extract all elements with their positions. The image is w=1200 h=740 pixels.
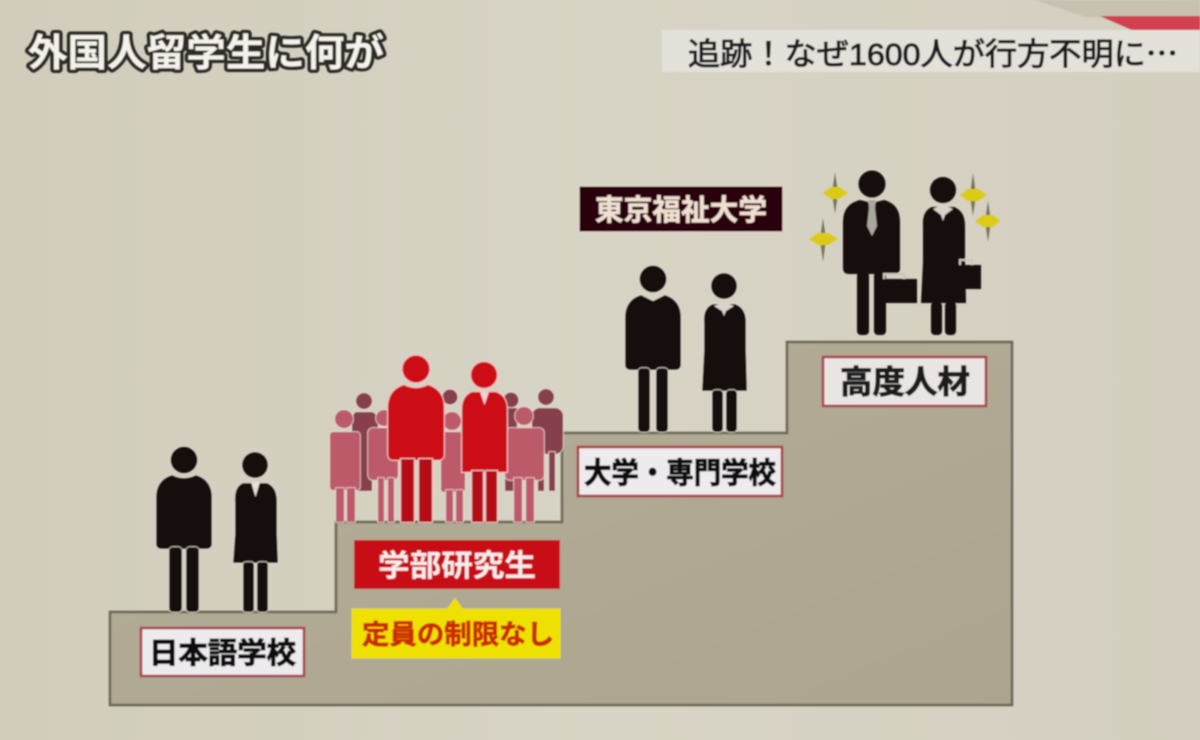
label: 東京福祉大学: [579, 186, 783, 232]
label: 日本語学校: [141, 628, 304, 676]
label: 高度人材: 高度人材: [840, 364, 970, 400]
figure: man, step 3: [625, 266, 681, 432]
icon: sparkle 3: [960, 173, 987, 216]
title: 外国人留学生に何が: [28, 33, 384, 75]
figure: pink student 3: [441, 412, 465, 522]
subtitle banner: 追跡！なぜ1600人が行方不明に⋯: [688, 37, 1178, 72]
label: 学部研究生: [354, 540, 560, 589]
figure: pink student 2: [368, 410, 398, 522]
figure: dark mauve student right: [532, 389, 563, 491]
figure: man, step 1: [156, 446, 212, 612]
label: 東京福祉大学: 東京福祉大学: [595, 194, 767, 227]
crowd: background students: [330, 389, 563, 522]
figure: red woman: [462, 362, 507, 522]
figure: dark mauve student left: [352, 393, 378, 491]
figure: dark mauve students behind: [442, 390, 518, 491]
figure: red man: [388, 356, 444, 522]
figure: pink student 1: [330, 410, 360, 522]
figure: woman, step 1: [233, 452, 278, 612]
figure: businessman with briefcase: [843, 170, 917, 335]
label: 大学・専門学校: [578, 447, 782, 496]
figure: woman, step 3: [702, 273, 747, 432]
figure: pink student 4: [505, 407, 544, 522]
label: 学部研究生: 学部研究生: [378, 550, 536, 583]
icon: sparkle 2: [809, 218, 838, 262]
label: 日本語学校: 日本語学校: [149, 637, 296, 670]
top-right corner band: [1035, 0, 1200, 30]
staircase: [110, 342, 1012, 705]
label: 高度人材: [823, 357, 986, 406]
callout: 定員の制限なし: 定員の制限なし: [362, 620, 554, 650]
label: 大学・専門学校: 大学・専門学校: [584, 457, 776, 490]
icon: sparkle 4: [975, 201, 1000, 242]
figure: businesswoman with briefcase: [921, 177, 981, 335]
icon: sparkle 1: [823, 172, 848, 214]
callout: 定員の制限なし: [351, 597, 561, 659]
